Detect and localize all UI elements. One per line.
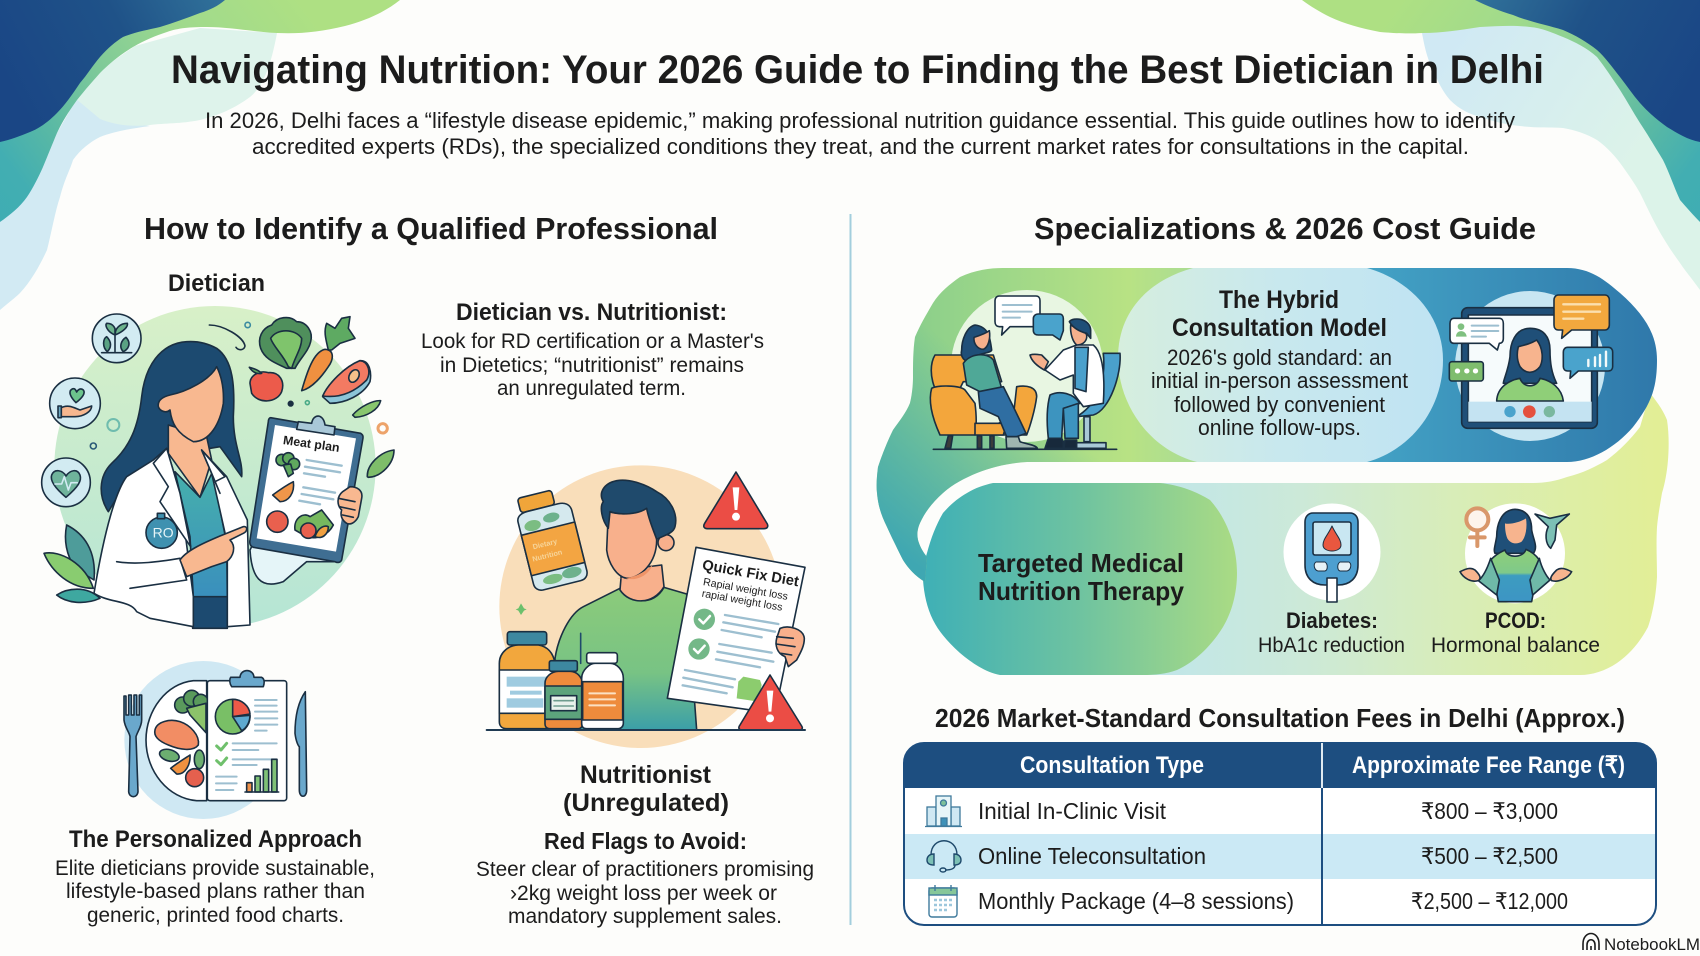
centre pale blob [1118,268,1443,462]
text: hybrid model: followed by convenient [1174,392,1385,417]
text: pcod: PCOD: [1485,608,1546,633]
header cell: fee range: Approximate Fee Range (₹) [1352,752,1625,779]
background circle [54,306,376,627]
supplement bottles [499,632,623,729]
icon: clinic building [925,796,962,826]
shirt [555,587,697,730]
ribbon background [877,268,1657,582]
heading: right column: Specializations & 2026 Cost Guide [1034,211,1536,246]
heading: targeted therapy: Targeted Medical [978,548,1184,578]
column divider [850,214,852,925]
hand holding flyer [776,627,804,667]
text: red flags: mandatory supplement sales. [508,905,782,928]
left illustration backdrop [951,290,1103,442]
illustration: personalized plate and plan [124,661,307,819]
woman on screen [1497,328,1563,401]
diet flyer: Quick Fix Diet [701,558,800,590]
text: red flags: ›2kg weight loss per week or [510,882,777,905]
text: nutritionist label: Nutritionist [580,761,712,789]
clipboard with meal plan: Meat plan [282,433,341,455]
text: dietician vs nutritionist: an unregulated term. [497,377,686,400]
speech bubbles [995,296,1063,340]
text: dietician vs nutritionist: Dietician vs. Nutritionist: [456,299,727,326]
row 3 fee: ₹2,500 – ₹12,000 [1411,888,1568,914]
text: dietician vs nutritionist: in Dietetics; “nutritionist” remains [440,354,744,377]
illustration: unregulated nutritionist [487,465,805,748]
table header [904,743,1656,788]
intro paragraph: In 2026, Delhi faces a “lifestyle disease epidemic,” making professional nutrition guidance essential. This guide outlines how to identify [205,108,1515,133]
baseline [487,729,805,731]
text: hybrid model: Consultation Model [1172,314,1387,342]
text: dietician vs nutritionist: Look for RD certification or a Master's [421,330,764,353]
supplement jar tilted: Dietary [532,536,559,551]
background circle [499,465,782,748]
knife [295,692,307,796]
plate half [146,681,207,801]
green pill heading shape [923,483,1237,675]
text: red flags [476,828,814,928]
hair [101,342,242,512]
heading: left column: How to Identify a Qualified Professional [144,211,718,246]
neck and face [158,367,223,497]
text: nutritionist label: (Unregulated) [563,789,729,817]
illustration: online follow-up on tablet [1449,295,1613,428]
diet flyer [667,547,805,713]
icon: heart pulse [42,458,90,507]
panel background ribbon [930,393,1669,675]
supplement jar tilted [512,486,589,592]
header cell: consultation type: Consultation Type [1020,752,1204,779]
text: red flags: Steer clear of practitioners promising [476,858,814,881]
text: diabetes: HbA1c reduction [1258,634,1405,657]
text: red flags: Red Flags to Avoid: [544,828,747,854]
table body [904,743,1656,925]
lab coat [94,448,340,627]
text: diabetes: Diabetes: [1286,608,1378,633]
fork [124,695,142,797]
text: personalized approach [55,826,375,927]
text: nutritionist label [563,761,729,817]
blue circle backdrop [124,661,282,819]
fee table [904,743,1656,925]
NotebookLM mark: NotebookLM [1604,935,1700,954]
floor line [933,448,1117,450]
row 1 label: Initial In-Clinic Visit [978,798,1167,824]
row 2 label: Online Teleconsultation [978,843,1206,869]
icon: headset [927,841,961,872]
badge [146,513,177,548]
icon: calendar [929,885,957,917]
panel: hybrid consultation model [877,268,1657,582]
logo glyph [1583,934,1599,950]
heading: targeted therapy: Nutrition Therapy [978,576,1185,606]
text: hybrid model: 2026's gold standard: an [1167,345,1392,370]
diet flyer: Rapial weight loss [702,576,789,603]
icon: hand with heart [50,378,100,429]
chat bubbles [1449,295,1613,381]
row 1 fee: ₹800 – ₹3,000 [1421,798,1558,824]
intro paragraph: accredited experts (RDs), the specialized conditions they treat, and the current market rates for consultations in the capital. [252,134,1469,159]
right illustration backdrop [1455,291,1605,441]
neck and head [607,507,674,601]
title: Navigating Nutrition: Your 2026 Guide to Finding the Best Dietician in Delhi [171,48,1544,92]
tablet [1462,308,1597,428]
decorative blobs: top right [1302,0,1700,290]
text: hybrid model: initial in-person assessment [1151,368,1408,393]
warning triangle bottom [739,675,802,730]
small decorative rings [90,322,387,449]
row 2 fee: ₹500 – ₹2,500 [1421,843,1558,869]
chair legs [945,436,994,448]
text: personalized approach: lifestyle-based plans rather than [66,880,365,903]
text: pcod: Hormonal balance [1431,634,1600,657]
panel: targeted medical nutrition therapy [923,393,1669,675]
icon: sprout [92,314,141,363]
pointing hand [180,527,247,577]
icon: pcod woman [1460,503,1572,603]
label: dietician: Dietician [168,270,265,297]
scrubs [175,472,227,628]
text: pcod [1431,608,1600,657]
illustration: dietician with meal plan [42,306,394,628]
small sparkle [516,603,527,615]
badge: RO [153,525,174,541]
warning triangle top [704,472,768,529]
diet flyer: rapial weight loss [701,588,783,614]
supplement jar tilted: Nutrition [531,547,564,564]
icon: glucose meter [1284,504,1380,602]
vegetables and food [249,317,394,477]
text: dietician vs nutritionist [421,299,764,400]
text: personalized approach: The Personalized Approach [69,826,362,853]
armchair [930,355,1037,435]
decorative blobs: top left [0,0,400,310]
highlighted row [905,834,1655,879]
text: personalized approach: Elite dieticians provide sustainable, [55,857,375,880]
table border and column divider [904,743,1656,925]
text: personalized approach: generic, printed food charts. [87,904,344,927]
illustration: in-person consultation [930,296,1120,449]
clipboard page [207,671,287,801]
heading: targeted therapy [978,548,1185,606]
fee table heading: 2026 Market-Standard Consultation Fees in Delhi (Approx.) [935,703,1625,733]
doctor [1030,319,1120,448]
text: diabetes [1258,608,1405,657]
leaves [44,525,100,602]
text: hybrid model: The Hybrid [1219,286,1339,314]
lobe shading [877,268,1100,582]
woman patient [961,325,1037,448]
hand holding clipboard [338,487,362,524]
row 3 label: Monthly Package (4–8 sessions) [978,888,1294,914]
text: hybrid model [1151,286,1408,440]
clipboard with meal plan [250,416,363,562]
text: hybrid model: online follow-ups. [1198,415,1361,440]
hair [601,480,676,539]
intro paragraph [205,108,1515,159]
food on plate [155,690,208,787]
